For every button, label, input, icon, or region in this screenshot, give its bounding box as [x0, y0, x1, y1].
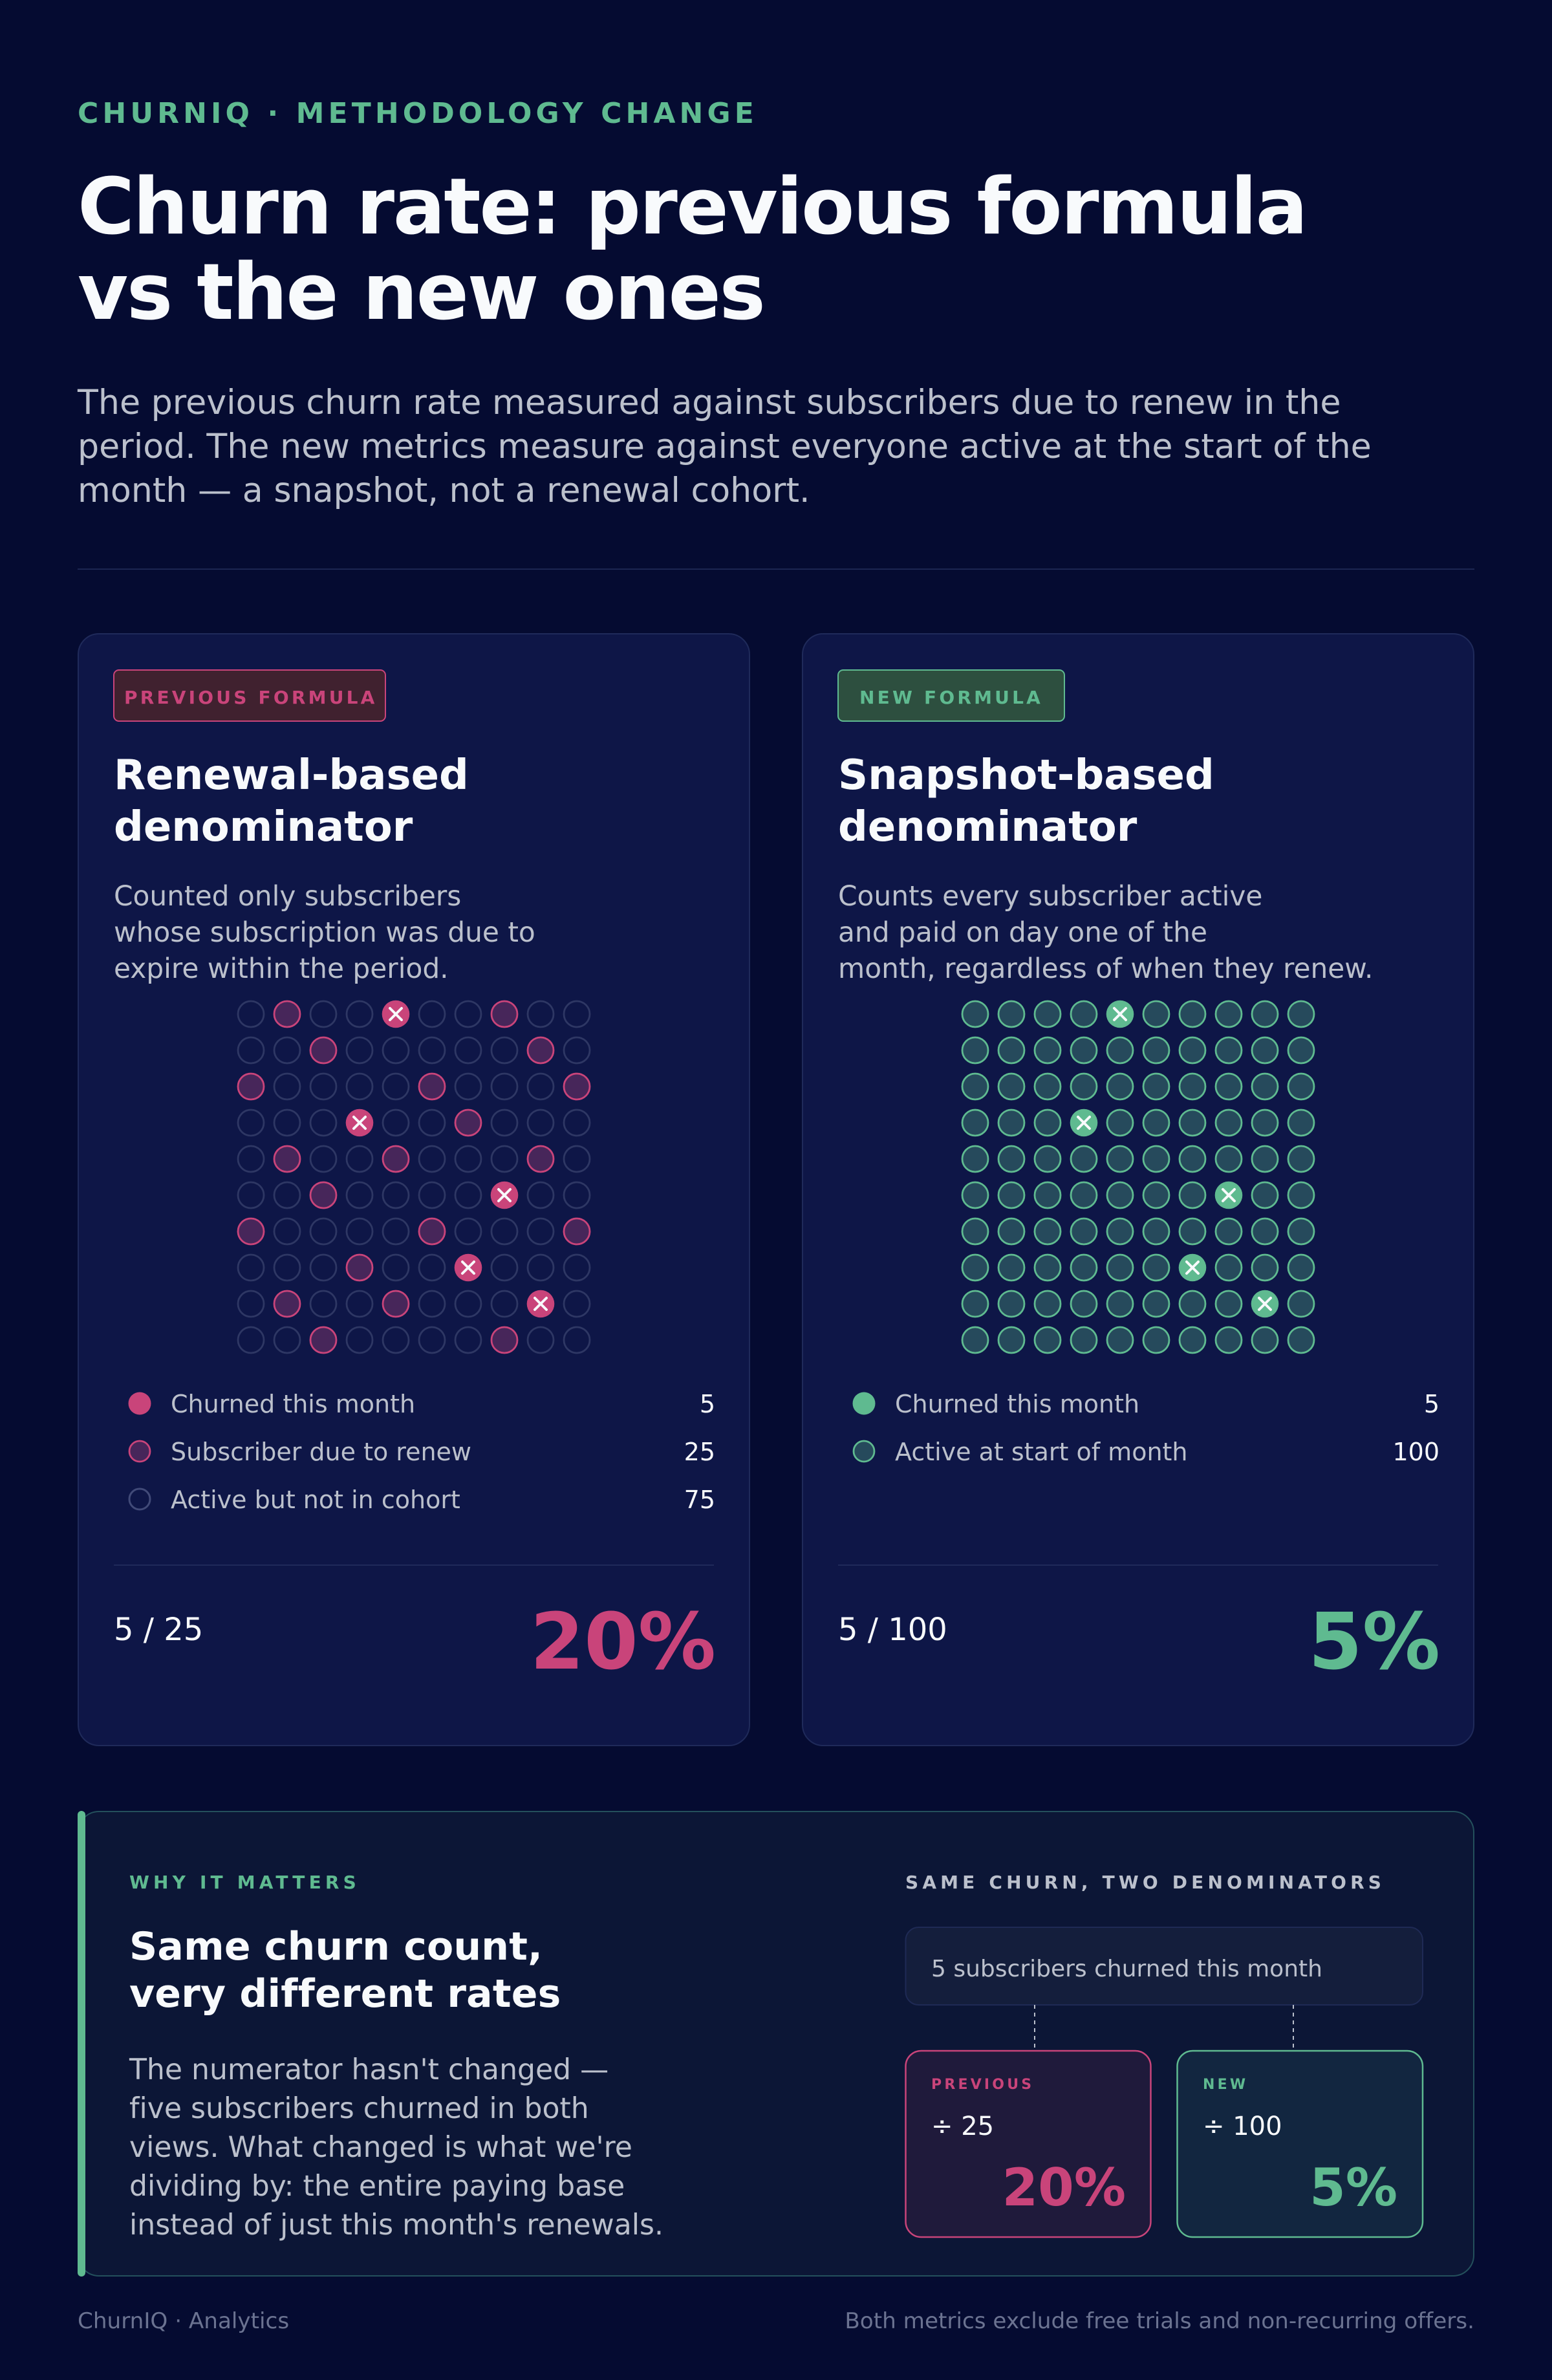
panel: why it matters	[78, 1811, 1474, 2277]
new description: Counts every subscriber active	[838, 880, 1262, 912]
subtitle: month — a snapshot, not a renewal cohort.	[78, 471, 810, 510]
previous description: Counted only subscribers	[114, 880, 461, 912]
why body: views. What changed is what we're	[129, 2131, 632, 2164]
why eyebrow: WHY IT MATTERS	[129, 1872, 360, 1893]
why body: instead of just this month's renewals.	[129, 2209, 663, 2242]
new result: 5 / 100	[838, 1612, 947, 1648]
previous description: whose subscription was due to	[114, 916, 535, 948]
previous badge	[114, 670, 385, 721]
new heading	[838, 752, 1214, 851]
previous result box: ÷ 25	[931, 2112, 994, 2141]
new result box: 5%	[1310, 2158, 1397, 2218]
title: vs the new ones	[78, 248, 764, 338]
why body	[129, 2053, 663, 2242]
why heading	[129, 1924, 561, 2017]
dashed connectors	[1035, 2005, 1293, 2048]
new badge: NEW FORMULA	[859, 687, 1043, 708]
previous heading	[114, 752, 469, 851]
new heading: Snapshot-based	[838, 752, 1214, 799]
previous description	[114, 880, 535, 984]
why heading: Same churn count,	[129, 1924, 543, 1969]
subtitle	[77, 384, 1372, 510]
header divider	[78, 568, 1474, 570]
previous card background	[78, 634, 749, 1746]
panel: new formula	[803, 634, 1474, 1746]
previous badge: PREVIOUS FORMULA	[124, 687, 378, 708]
previous result box: 20%	[1002, 2158, 1126, 2218]
new legend: Active at start of month	[895, 1438, 1188, 1466]
panel: previous formula	[78, 634, 749, 1746]
previous heading: Renewal-based	[114, 752, 469, 799]
new legend: 5	[1424, 1390, 1439, 1418]
new description	[838, 880, 1373, 984]
why body: dividing by: the entire paying base	[129, 2170, 625, 2203]
previous heading: denominator	[114, 803, 413, 851]
new badge	[838, 670, 1064, 721]
previous legend: 25	[684, 1438, 715, 1466]
previous result box: PREVIOUS	[931, 2077, 1034, 2093]
new legend: 100	[1392, 1438, 1439, 1466]
accent bar	[78, 1811, 85, 2277]
footer: ChurnIQ · Analytics	[78, 2308, 289, 2334]
new description: and paid on day one of the	[838, 916, 1207, 948]
eyebrow: CHURNIQ · METHODOLOGY CHANGE	[78, 97, 758, 130]
previous result: 5 / 25	[114, 1612, 203, 1648]
why panel background	[78, 1812, 1474, 2276]
previous description: expire within the period.	[114, 953, 449, 984]
footer	[78, 2308, 1474, 2334]
diagram: same churn, two denominators	[905, 1872, 1423, 2237]
title: Churn rate: previous formula	[78, 162, 1306, 252]
subtitle: The previous churn rate measured against subscribers due to renew in the	[77, 384, 1341, 422]
new legend: Churned this month	[895, 1390, 1139, 1418]
new result box: NEW	[1203, 2077, 1248, 2093]
why heading: very different rates	[129, 1971, 561, 2017]
new description: month, regardless of when they renew.	[838, 953, 1373, 984]
new dot grid	[962, 1001, 1314, 1353]
new card background	[803, 634, 1474, 1746]
previous legend: 75	[684, 1486, 715, 1514]
new result	[838, 1564, 1440, 1687]
previous result: 20%	[530, 1597, 716, 1687]
title	[78, 162, 1306, 338]
previous legend: Churned this month	[171, 1390, 415, 1418]
previous legend: Active but not in cohort	[171, 1486, 460, 1514]
new result box: ÷ 100	[1203, 2112, 1282, 2141]
previous result	[114, 1564, 716, 1687]
new heading: denominator	[838, 803, 1137, 851]
new result: 5%	[1308, 1597, 1440, 1687]
previous legend	[128, 1390, 715, 1514]
previous legend: Subscriber due to renew	[171, 1438, 471, 1466]
previous dot grid	[238, 1001, 590, 1353]
churn source box: 5 subscribers churned this month	[931, 1956, 1322, 1982]
why body: The numerator hasn't changed —	[129, 2053, 609, 2086]
previous result box	[905, 2051, 1151, 2237]
footer: Both metrics exclude free trials and non-recurring offers.	[845, 2308, 1474, 2334]
diagram label: SAME CHURN, TWO DENOMINATORS	[905, 1872, 1385, 1893]
why body: five subscribers churned in both	[129, 2092, 589, 2125]
churn source box	[905, 1927, 1423, 2005]
previous legend: 5	[700, 1390, 715, 1418]
subtitle: period. The new metrics measure against everyone active at the start of the	[78, 427, 1372, 466]
new legend	[852, 1390, 1439, 1466]
new result box	[1177, 2051, 1423, 2237]
